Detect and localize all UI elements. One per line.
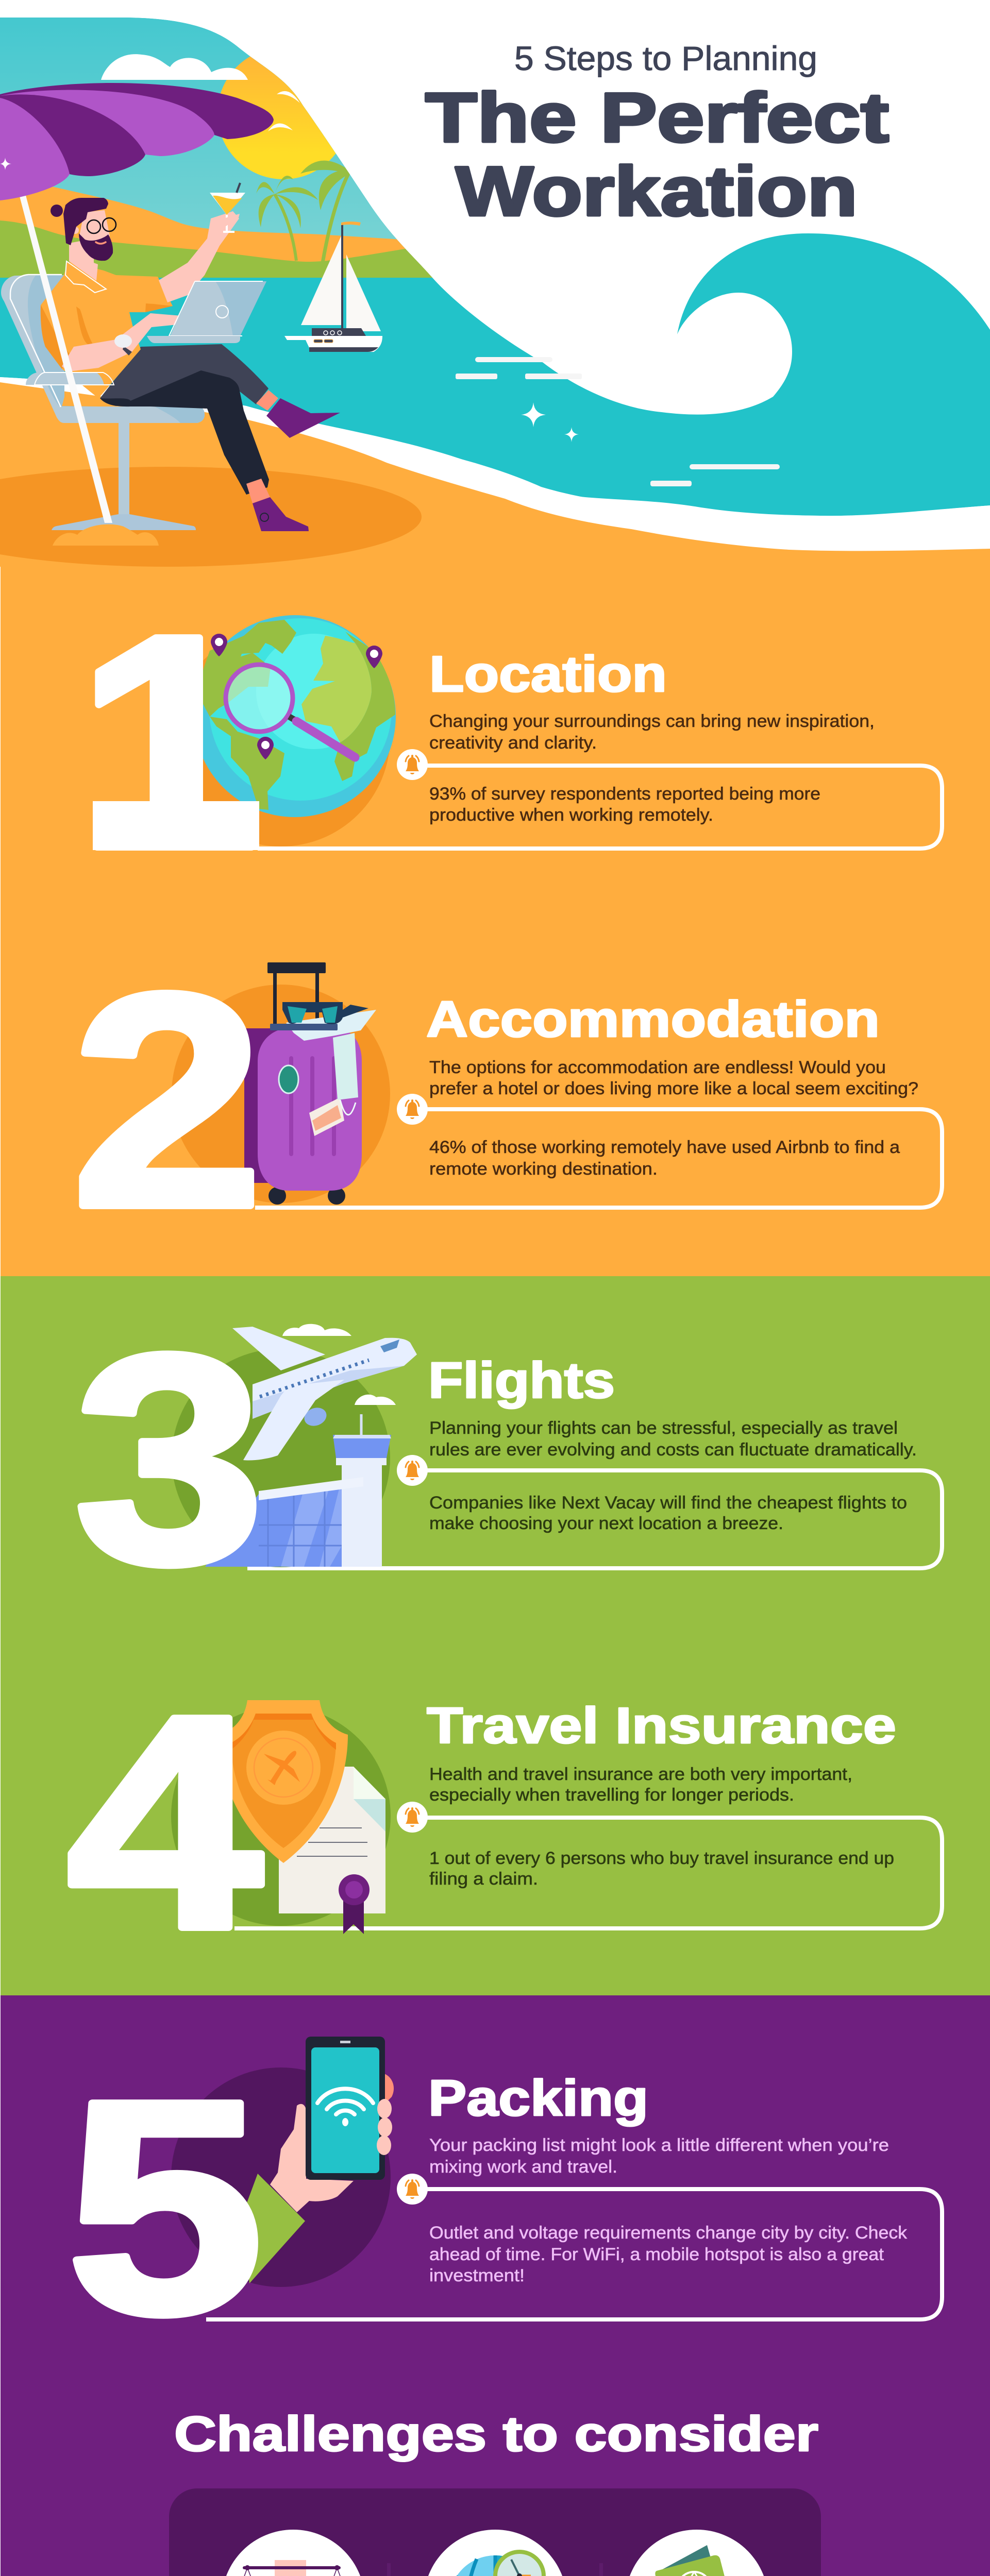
challenge: work life balance xyxy=(218,2530,368,2576)
sailboat xyxy=(284,222,382,352)
clouds xyxy=(282,1324,396,1405)
sparkles xyxy=(521,402,579,442)
watch xyxy=(123,346,132,355)
challenge: visas xyxy=(620,2530,774,2576)
stat: remote working destination. xyxy=(429,1159,658,1179)
heading: Flights xyxy=(428,1352,615,1409)
paragraph: prefer a hotel or does living more like a local seem exciting? xyxy=(429,1079,918,1098)
stat: ahead of time. For WiFi, a mobile hotspot is also a great xyxy=(429,2245,884,2264)
section 5: packing xyxy=(66,2037,942,2377)
man character xyxy=(26,183,340,531)
shirt xyxy=(41,262,173,398)
heading: Travel Insurance xyxy=(427,1697,896,1754)
stat: 1 out of every 6 persons who buy travel insurance end up xyxy=(429,1849,894,1868)
airplane xyxy=(232,1327,417,1461)
lower shoe xyxy=(253,497,309,531)
callout outline xyxy=(247,1470,942,1568)
stat xyxy=(429,1138,900,1179)
paragraph xyxy=(429,1058,918,1098)
forearm on laptop xyxy=(62,313,181,371)
stat xyxy=(429,2223,908,2285)
magnifying glass xyxy=(226,665,355,757)
cocktail glass xyxy=(210,183,245,233)
beach chair xyxy=(1,275,205,530)
stat: 46% of those working remotely have used Airbnb to find a xyxy=(429,1138,900,1157)
paragraph: Changing your surroundings can bring new inspiration, xyxy=(429,711,875,731)
globe illustration xyxy=(194,615,396,817)
backdrop circle xyxy=(171,2067,391,2287)
icon: passport xyxy=(625,2530,768,2576)
green hill xyxy=(0,221,443,278)
paragraph: mixing work and travel. xyxy=(429,2157,617,2177)
section 2: accommodation xyxy=(71,931,942,1270)
big number 4: 4 xyxy=(66,1653,265,1992)
big number 5: 5 xyxy=(66,2038,264,2377)
section 1: location xyxy=(76,572,942,911)
callout outline xyxy=(255,1109,942,1208)
glasses xyxy=(87,220,100,233)
stat xyxy=(429,784,820,825)
green panel background xyxy=(1,1276,990,1995)
paragraph: Planning your flights can be stressful, especially as travel xyxy=(429,1418,898,1438)
sky xyxy=(0,18,443,278)
upper leg xyxy=(100,370,269,495)
sun xyxy=(221,57,336,179)
backdrop circle xyxy=(172,1349,390,1567)
purple panel background xyxy=(1,1995,990,2576)
stat: Companies like Next Vacay will find the cheapest flights to xyxy=(429,1493,907,1513)
water and wave xyxy=(0,18,990,516)
title block xyxy=(425,39,889,230)
main title line two: Workation xyxy=(456,152,858,230)
collar xyxy=(65,261,106,293)
head xyxy=(79,210,110,246)
paragraph xyxy=(429,1418,917,1460)
birds xyxy=(268,91,300,131)
neck xyxy=(69,239,98,281)
paragraph: especially when travelling for longer periods. xyxy=(429,1785,794,1805)
stat: make choosing your next location a breeze. xyxy=(429,1514,783,1533)
orange hill xyxy=(0,187,432,278)
backdrop circle xyxy=(172,985,390,1203)
callout outline xyxy=(206,2189,942,2319)
challenges heading: Challenges to consider xyxy=(174,2406,818,2462)
bell icon xyxy=(397,2174,428,2205)
armrest xyxy=(26,372,104,385)
bell icon xyxy=(397,1094,428,1125)
paragraph xyxy=(429,1765,852,1805)
paragraph xyxy=(429,711,875,753)
icon: globe with clock xyxy=(424,2530,567,2576)
big number 1: 1 xyxy=(76,572,261,911)
paragraph: The options for accommodation are endless! Would you xyxy=(429,1058,886,1077)
palm tree right xyxy=(300,161,349,263)
lower pants leg xyxy=(100,344,269,406)
paragraph: rules are ever evolving and costs can fluctuate dramatically. xyxy=(429,1440,917,1460)
document with ribbon xyxy=(279,1767,385,1934)
hair and beard xyxy=(63,198,108,245)
callout outline xyxy=(234,1818,942,1928)
sand xyxy=(0,382,990,1276)
paragraph: Your packing list might look a little different when you’re xyxy=(429,2136,889,2155)
sky, sun, hills and palms xyxy=(0,18,443,278)
globe shadow xyxy=(172,628,390,846)
umbrella pole xyxy=(20,195,112,523)
bell icon xyxy=(397,1802,428,1833)
hero: beach and wave background xyxy=(0,18,990,1276)
laptop xyxy=(170,281,266,336)
sand shadow xyxy=(0,467,422,567)
stat: filing a claim. xyxy=(429,1869,538,1889)
challenges card xyxy=(169,2488,821,2576)
raised arm xyxy=(159,211,239,302)
paragraph: Health and travel insurance are both very important, xyxy=(429,1765,852,1784)
big number 2: 2 xyxy=(71,931,264,1270)
sand mound xyxy=(53,524,159,546)
heading: Location xyxy=(429,646,667,702)
white foam band xyxy=(0,377,990,551)
callout outline xyxy=(258,766,942,849)
ankle lower xyxy=(246,479,270,503)
cloud xyxy=(101,54,248,80)
map pins xyxy=(211,634,382,759)
palm tree left xyxy=(256,176,318,261)
bell icon xyxy=(397,749,428,780)
suitcase illustration xyxy=(244,962,376,1205)
wave lines xyxy=(456,357,780,486)
big number 3: 3 xyxy=(74,1293,265,1625)
paragraph xyxy=(429,2136,889,2177)
stat: Outlet and voltage requirements change city by city. Check xyxy=(429,2223,908,2243)
heading: Accommodation xyxy=(426,991,880,1047)
control tower and terminal xyxy=(205,1414,391,1567)
stat: productive when working remotely. xyxy=(429,805,713,825)
stat xyxy=(429,1849,894,1889)
umbrella canopy xyxy=(0,83,274,200)
shield xyxy=(219,1700,348,1863)
section 3: flights xyxy=(74,1293,942,1625)
stat: investment! xyxy=(429,2266,525,2285)
heading: Packing xyxy=(428,2070,648,2126)
hand holding phone xyxy=(242,2037,394,2283)
main title line one: The Perfect xyxy=(425,78,889,157)
backdrop circle xyxy=(171,1706,391,1926)
icon: balance scale xyxy=(222,2530,365,2576)
paragraph: creativity and clarity. xyxy=(429,733,597,753)
challenge: time zones xyxy=(410,2530,580,2576)
bell icon xyxy=(397,1455,428,1486)
stat: 93% of survey respondents reported being more xyxy=(429,784,820,804)
ankle and raised shoe xyxy=(256,390,278,411)
subtitle: 5 Steps to Planning xyxy=(514,39,817,77)
stat xyxy=(429,1493,907,1533)
section 4: travel insurance xyxy=(66,1653,942,1992)
